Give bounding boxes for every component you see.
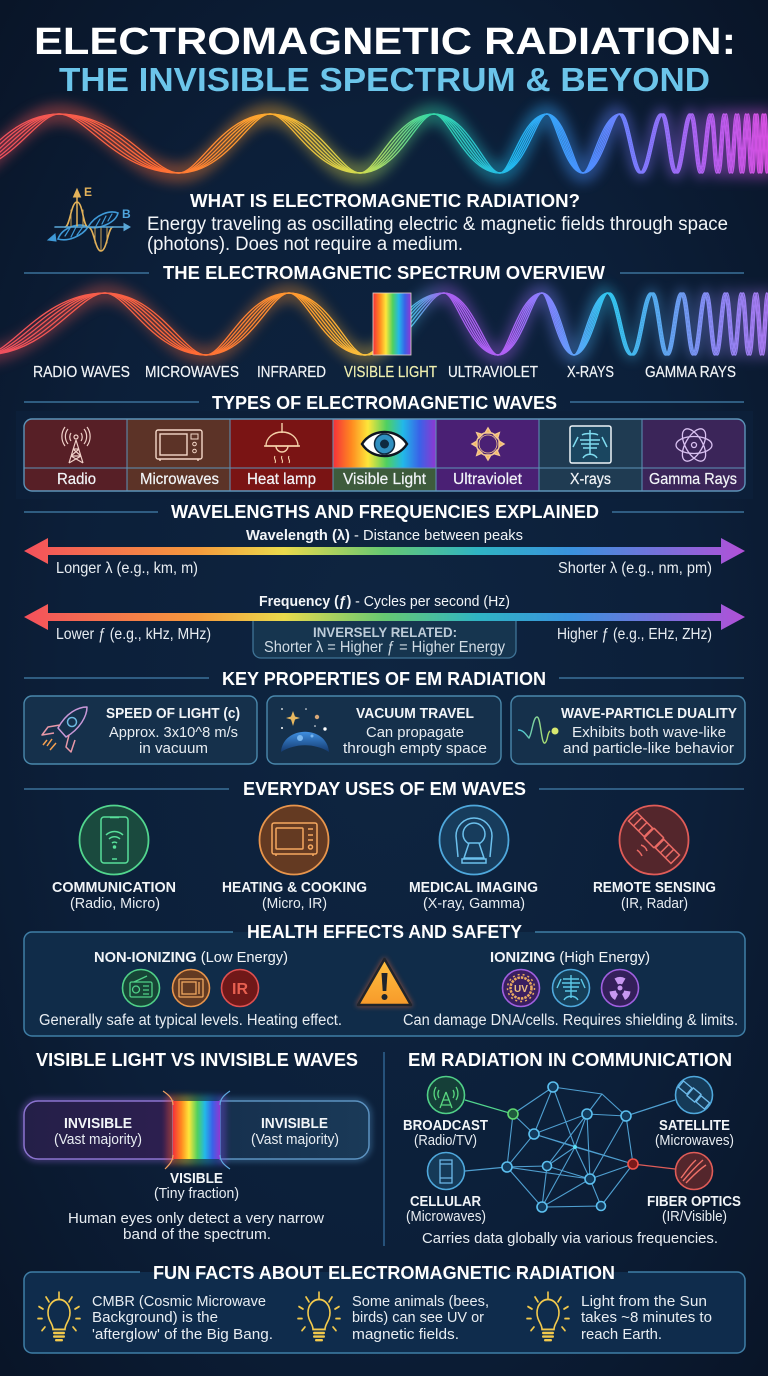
icon: microwave (156, 430, 202, 461)
panel: fun facts (24, 1263, 745, 1353)
icon: infrared (222, 970, 258, 1006)
icon: microwave (172, 970, 210, 1006)
node: fiber optics (647, 1152, 741, 1225)
callout: inversely related: INVERSELY RELATED: (313, 624, 457, 640)
frequency end labels: Lower ƒ (e.g., kHz, MHz) (56, 626, 211, 643)
comparison bar: visible vs invisible: INVISIBLE (64, 1116, 132, 1132)
icon: heat lamp (264, 423, 300, 463)
comparison bar: visible vs invisible (24, 1091, 369, 1202)
title (34, 21, 736, 98)
node: fiber optics: FIBER OPTICS (647, 1194, 741, 1210)
frequency end labels (56, 626, 712, 643)
title: THE INVISIBLE SPECTRUM & BEYOND (59, 61, 710, 98)
icon: electric and magnetic field wave (48, 185, 131, 251)
callout: inversely related (253, 620, 516, 658)
node: fiber optics: (IR/Visible) (662, 1208, 727, 1225)
heading: wavelengths and frequencies: WAVELENGTHS AND FREQUENCIES EXPLAINED (171, 502, 599, 522)
node: cellular: (Microwaves) (406, 1208, 486, 1225)
wavelength end labels: Shorter λ (e.g., nm, pm) (558, 560, 712, 577)
icon: radio (122, 970, 160, 1006)
frequency arrow (24, 604, 745, 630)
fact 3: reach Earth. (581, 1326, 662, 1343)
node: broadcast: (Radio/TV) (414, 1132, 477, 1149)
spectrum labels (33, 364, 736, 381)
heading: types of waves: TYPES OF ELECTROMAGNETIC WAVES (212, 393, 557, 413)
wavelength arrow (24, 538, 745, 564)
type labels: Radio (57, 471, 96, 488)
spectrum labels: ULTRAVIOLET (448, 364, 538, 381)
node: broadcast: BROADCAST (403, 1118, 488, 1134)
spectrum labels: RADIO WAVES (33, 364, 130, 381)
use: remote sensing: REMOTE SENSING (593, 879, 716, 896)
comparison bar: visible vs invisible: (Tiny fraction) (154, 1185, 239, 1202)
callout: inversely related: Shorter λ = Higher ƒ = Higher Energy (264, 639, 505, 656)
use: remote sensing (593, 806, 716, 912)
icon: tower (434, 1087, 458, 1108)
panel: vacuum travel: through empty space (343, 740, 487, 757)
panel: health effects and safety: IONIZING (High Energy) (490, 949, 650, 966)
fact 2: magnetic fields. (352, 1326, 459, 1343)
heading: visible light vs invisible waves: VISIBLE LIGHT VS INVISIBLE WAVES (36, 1049, 358, 1070)
use: communication: (Radio, Micro) (70, 895, 160, 912)
fact 3 (527, 1292, 712, 1343)
comparison bar: visible vs invisible: (Vast majority) (251, 1131, 339, 1148)
type labels: Gamma Rays (649, 471, 737, 488)
section: what is electromagnetic radiation: WHAT IS ELECTROMAGNETIC RADIATION? (190, 191, 580, 211)
icon: eye (362, 432, 407, 456)
panel: vacuum travel: Can propagate (366, 724, 464, 741)
panel: wave-particle duality: Exhibits both wave-like (572, 724, 726, 741)
icon: satellite (678, 1080, 710, 1110)
panel: health effects and safety: NON-IONIZING (Low Energy) (94, 949, 288, 966)
icon: atom (676, 425, 712, 465)
spectrum labels: X-RAYS (567, 364, 614, 381)
node: cellular: CELLULAR (410, 1194, 481, 1210)
panel: fun facts: FUN FACTS ABOUT ELECTROMAGNETIC RADIATION (153, 1263, 615, 1283)
use: heating and cooking: (Micro, IR) (262, 895, 327, 912)
panel: health effects and safety (24, 922, 745, 1036)
fact 3: takes ~8 minutes to (581, 1309, 712, 1326)
use: medical imaging: (X-ray, Gamma) (423, 895, 525, 912)
frequency label: Frequency (ƒ) - Cycles per second (Hz) (259, 593, 510, 610)
icon: wave and particle (518, 717, 558, 743)
icon: fiber strands (681, 1160, 706, 1183)
panel: speed of light: SPEED OF LIGHT (c) (106, 705, 240, 722)
use: heating and cooking: HEATING & COOKING (222, 879, 367, 896)
heading: key properties: KEY PROPERTIES OF EM RADIATION (222, 669, 546, 689)
panel: speed of light: Approx. 3x10^8 m/s (109, 724, 238, 741)
type labels: Visible Light (343, 471, 427, 488)
type labels: X-rays (570, 471, 611, 488)
section: what is electromagnetic radiation: (photons). Does not require a medium. (147, 234, 463, 255)
visible light prism band (373, 293, 411, 355)
icon: radiation (602, 970, 638, 1006)
use: remote sensing: (IR, Radar) (621, 895, 688, 912)
icon: sun (472, 428, 504, 460)
fact 1: 'afterglow' of the Big Bang. (92, 1326, 273, 1343)
panel: health effects and safety: Can damage DNA/cells. Requires shielding & limits. (403, 1012, 738, 1029)
use: communication: COMMUNICATION (52, 879, 176, 896)
use: heating and cooking (222, 806, 367, 912)
icon: infrared: IR (232, 981, 248, 998)
fact 1: Background) is the (92, 1309, 218, 1326)
panel: vacuum travel: VACUUM TRAVEL (356, 705, 474, 722)
icon: satellite (628, 812, 680, 864)
icon: rocket (42, 707, 87, 752)
icon: electric and magnetic field wave: E (84, 185, 92, 199)
type labels: Heat lamp (247, 471, 316, 488)
fact 2: Some animals (bees, (352, 1293, 489, 1310)
node: satellite (655, 1076, 734, 1149)
fact 1: CMBR (Cosmic Microwave (92, 1293, 266, 1310)
icon: phone (440, 1160, 452, 1183)
heading: everyday uses: EVERYDAY USES OF EM WAVES (243, 779, 526, 799)
icon: x-ray skeleton (552, 970, 590, 1006)
wavelength end labels (56, 560, 712, 577)
text: human eyes note: band of the spectrum. (123, 1226, 271, 1243)
icon: radio tower (62, 427, 90, 463)
comparison bar: visible vs invisible: INVISIBLE (261, 1116, 328, 1132)
icon: electric and magnetic field wave: B (122, 207, 131, 221)
icon: ultraviolet (502, 970, 540, 1006)
network diagram (465, 1082, 675, 1212)
spectrum labels: MICROWAVES (145, 364, 239, 381)
spectrum labels: GAMMA RAYS (645, 364, 736, 381)
comparison bar: visible vs invisible: (Vast majority) (54, 1131, 142, 1148)
fact 2 (298, 1292, 489, 1343)
icon: ultraviolet: UV (514, 984, 528, 995)
title: ELECTROMAGNETIC RADIATION: (34, 21, 736, 63)
icon: MRI scanner (456, 818, 492, 863)
fact 3: Light from the Sun (581, 1293, 707, 1310)
node: cellular (406, 1152, 486, 1225)
text: human eyes note: Human eyes only detect a very narrow (68, 1210, 324, 1227)
hero rainbow wave (0, 114, 768, 173)
node: broadcast (403, 1076, 488, 1149)
comparison bar: visible vs invisible: VISIBLE (170, 1171, 223, 1187)
icon: planet and stars (281, 708, 329, 752)
text: human eyes note (68, 1210, 324, 1243)
panel: wave-particle duality (511, 696, 745, 764)
icon: warning triangle (356, 957, 413, 1006)
panel: health effects and safety: HEALTH EFFECTS AND SAFETY (247, 922, 522, 942)
node: satellite: (Microwaves) (655, 1132, 734, 1149)
wavelength end labels: Longer λ (e.g., km, m) (56, 560, 198, 577)
frequency end labels: Higher ƒ (e.g., EHz, ZHz) (557, 626, 712, 643)
panel: wave-particle duality: WAVE-PARTICLE DUALITY (561, 705, 737, 722)
section: what is electromagnetic radiation: Energy traveling as oscillating electric & magnetic fields through space (147, 214, 728, 235)
type labels: Ultraviolet (453, 471, 523, 488)
section: what is electromagnetic radiation (147, 191, 728, 255)
use: medical imaging (409, 806, 538, 912)
heading: EM radiation in communication: EM RADIATION IN COMMUNICATION (408, 1049, 732, 1070)
icon: microwave (272, 823, 317, 856)
spectrum labels: INFRARED (257, 364, 326, 381)
panel: health effects and safety: Generally safe at typical levels. Heating effect. (39, 1012, 342, 1029)
spectrum labels: VISIBLE LIGHT (344, 364, 437, 381)
use: communication (52, 806, 176, 912)
wavelength label: Wavelength (λ) - Distance between peaks (246, 527, 523, 544)
icon: x-ray (570, 426, 611, 463)
text: carries data: Carries data globally via various frequencies. (422, 1230, 718, 1247)
type labels (57, 471, 737, 488)
type labels: Microwaves (140, 471, 219, 488)
panel: types of electromagnetic waves (16, 411, 753, 499)
fact 2: birds) can see UV or (352, 1309, 484, 1326)
panel: speed of light: in vacuum (139, 740, 208, 757)
heading: spectrum overview: THE ELECTROMAGNETIC SPECTRUM OVERVIEW (163, 263, 605, 283)
panel: wave-particle duality: and particle-like behavior (563, 740, 734, 757)
panel: speed of light (24, 696, 257, 764)
use: medical imaging: MEDICAL IMAGING (409, 879, 538, 896)
node: satellite: SATELLITE (659, 1118, 730, 1134)
fact 1 (38, 1292, 273, 1343)
panel: vacuum travel (267, 696, 501, 764)
icon: smartphone (101, 817, 128, 863)
spectrum wave (0, 293, 768, 355)
